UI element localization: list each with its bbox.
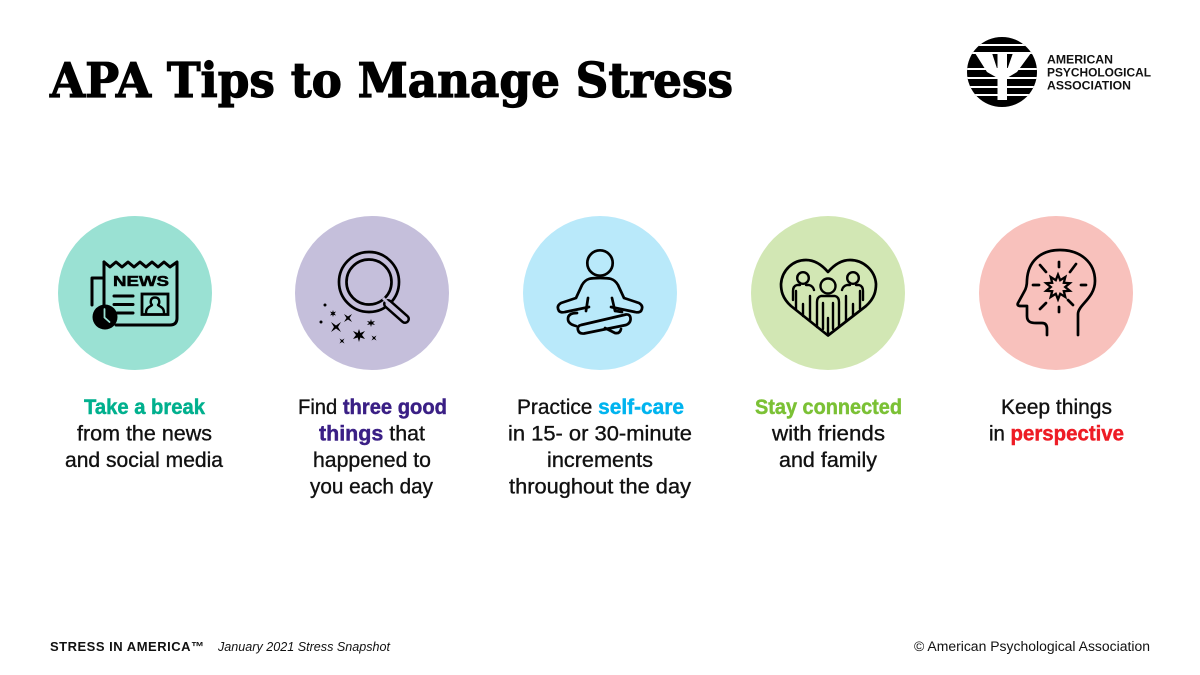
caption: stay connected xyxy=(755,396,902,472)
caption: three good things: you each day xyxy=(310,476,433,498)
logo wordmark: ASSOCIATION xyxy=(1047,80,1131,92)
logo mark: striped circle with psi xyxy=(965,37,1039,107)
icon circle: head xyxy=(979,216,1133,370)
footer: copyright: © American Psychological Association xyxy=(914,639,1150,654)
caption: stay connected: and family xyxy=(779,449,878,472)
caption: take a break: from the news xyxy=(77,422,212,446)
caption: stay connected: Stay connected xyxy=(755,396,902,419)
logo: American Psychological Association xyxy=(965,37,1151,107)
logo wordmark: AMERICAN xyxy=(1047,54,1113,66)
caption: keep perspective xyxy=(989,396,1124,446)
footer: stress in america: STRESS IN AMERICA™ xyxy=(50,639,204,654)
caption: three good things: things that xyxy=(319,422,425,446)
logo wordmark xyxy=(1047,54,1151,92)
logo wordmark: PSYCHOLOGICAL xyxy=(1047,68,1151,80)
icon circle: meditation xyxy=(523,216,677,370)
icon circle: magnifier xyxy=(295,216,449,370)
icon circle: heart family xyxy=(751,216,905,370)
icon: newspaper with clock: NEWS xyxy=(113,273,169,290)
panel: stay connected xyxy=(751,216,905,472)
icon: newspaper with clock xyxy=(92,262,177,330)
caption: three good things: happened to xyxy=(313,449,431,472)
icon: person meditating xyxy=(558,250,642,334)
caption: keep perspective: Keep things xyxy=(1001,396,1112,419)
caption: keep perspective: in perspective xyxy=(989,422,1124,446)
caption: self-care: in 15- or 30-minute xyxy=(508,422,692,446)
panel: self-care xyxy=(508,216,692,498)
icon: head with burst xyxy=(1018,250,1095,335)
panel: keep perspective xyxy=(979,216,1133,446)
icon: magnifying glass and sparkles xyxy=(320,252,405,344)
caption: take a break: Take a break xyxy=(84,396,205,419)
panel: take a break xyxy=(58,216,223,472)
caption: take a break xyxy=(65,396,223,472)
caption: self-care: increments xyxy=(547,449,653,472)
icon: heart with three people xyxy=(781,260,876,336)
footer: snapshot date: January 2021 Stress Snapshot xyxy=(217,639,391,654)
caption: three good things xyxy=(298,396,447,498)
panel: three good things xyxy=(295,216,449,498)
icon circle: news xyxy=(58,216,212,370)
title: APA Tips to Manage Stress xyxy=(49,53,733,109)
caption: self-care: throughout the day xyxy=(509,476,692,498)
caption: take a break: and social media xyxy=(65,449,223,472)
caption: self-care xyxy=(508,396,692,498)
caption: stay connected: with friends xyxy=(771,422,885,446)
caption: three good things: Find three good xyxy=(298,396,447,419)
caption: self-care: Practice self-care xyxy=(517,396,684,419)
